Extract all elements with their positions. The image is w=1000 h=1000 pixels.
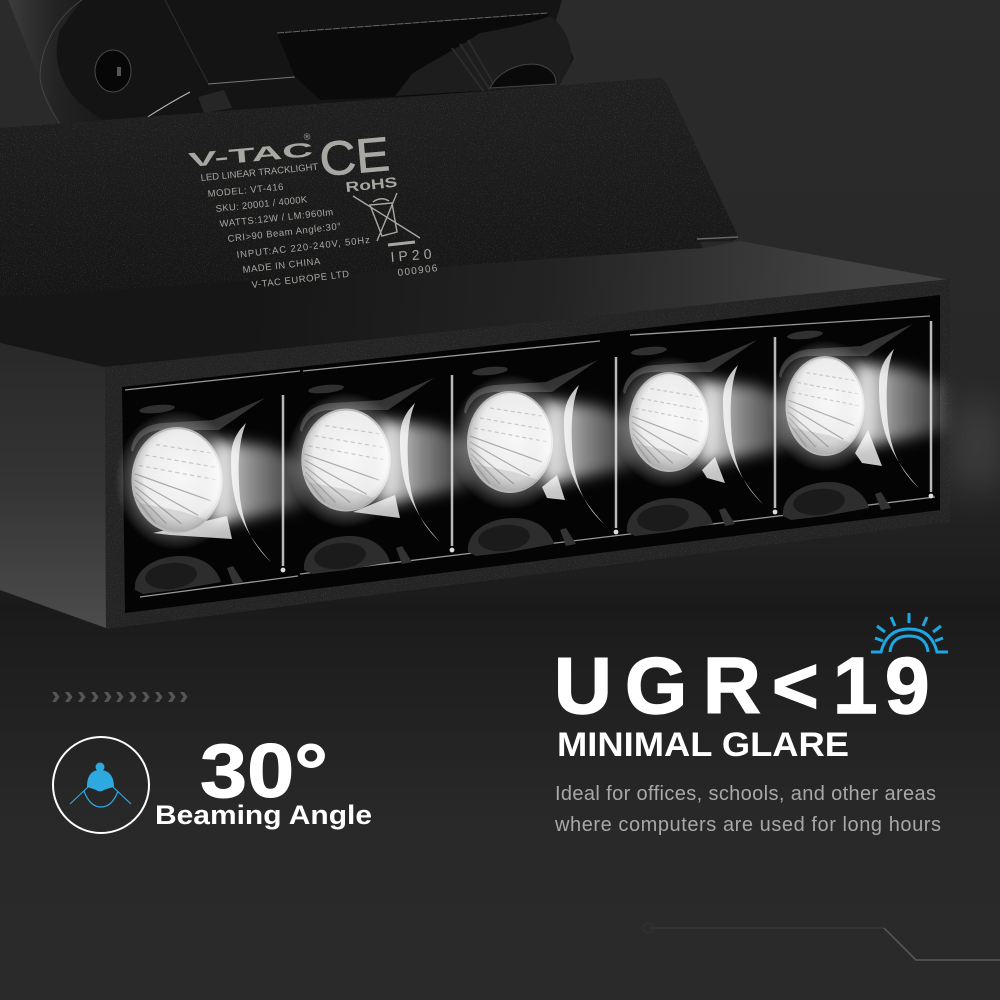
subheading: minimal glare: MINIMAL GLARE [557,726,849,764]
registered mark: ® [303,131,311,142]
body side face [0,343,106,628]
label specification text: CRI>90 Beam Angle:30° [227,221,342,245]
shadow beneath the luminaire [0,460,1000,830]
CE mark: CE [317,128,392,187]
product photo: linear tracklight [0,0,1000,629]
label specification text: V-TAC EUROPE LTD [251,269,350,291]
LED cell 2 [286,375,454,574]
heading: 30 degrees: 30° [200,729,328,814]
label specification text: MODEL: VT-416 [207,182,284,200]
decorative circuit line [643,923,1000,960]
body top face [0,241,950,367]
icon: crossed-out bin [353,193,420,245]
icon: glare sun [871,613,948,652]
inner frame highlights [125,316,935,597]
product label print [188,128,439,291]
label specification text: LED LINEAR TRACKLIGHT [200,162,319,184]
label specification text: INPUT:AC 220-240V, 50Hz [236,235,371,261]
LED cell 4 [613,337,777,536]
upper label plate [0,78,738,300]
heading: UGR<19: UGR<19 [554,641,930,730]
label specification text: SKU: 20001 / 4000K [215,194,308,215]
adjustment screw hole [95,50,131,92]
subheading: beaming angle: Beaming Angle [155,800,372,830]
batch number: 000906 [397,263,439,279]
upper track block [277,13,556,100]
recessed black optics window [122,295,940,613]
icon: beam angle [53,737,149,833]
RoHS mark: RoHS [345,174,398,195]
label specification text [200,162,371,291]
LED cell 1 [115,395,285,594]
LED cell 5 [769,321,933,520]
description text: Ideal for offices, schools, and other areas [555,783,936,805]
light beams [212,362,945,526]
chevron row [52,692,188,702]
LED cell 3 [450,357,618,556]
body front bezel [105,279,950,629]
label specification text: MADE IN CHINA [242,256,321,276]
description text [554,783,941,836]
outer glow right of the housing [955,400,1000,490]
label specification text: WATTS:12W / LM:960lm [219,207,334,230]
track adapter mount [8,0,574,126]
grooved bracket [395,16,571,96]
IP20 mark: IP20 [390,245,432,265]
description text: where computers are used for long hours [554,814,941,836]
V-TAC logo: V-TAC [188,139,314,172]
